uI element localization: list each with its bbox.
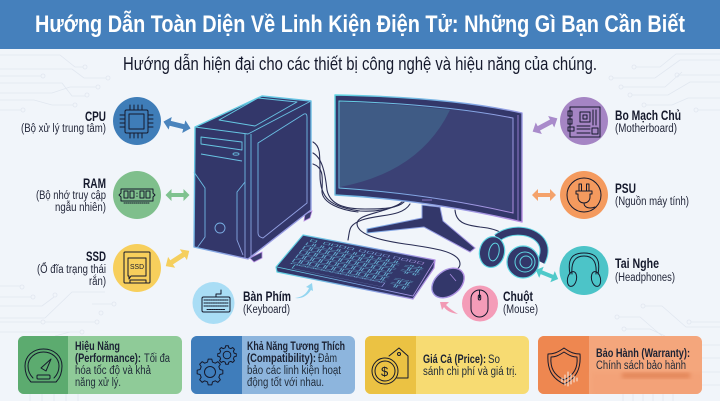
text: performance: hóa tốc độ và khả: [75, 365, 151, 377]
text: compatibility: [247, 341, 345, 389]
label: RAM: (Bộ nhớ truy cập: [36, 190, 106, 202]
text: performance: Tối đa: [144, 353, 170, 365]
icon: keyboard: [202, 290, 230, 312]
monitor screen: [339, 101, 513, 213]
component: keyboard: [192, 282, 291, 324]
label: headphones: [615, 256, 675, 284]
text: performance: Hiệu Năng: [75, 341, 120, 353]
component: headphones: [560, 246, 675, 295]
text: compatibility: động tốt với nhau.: [247, 377, 324, 389]
component: SSD: [37, 244, 161, 292]
arrow: headphones: [534, 264, 560, 285]
label: PSU: (Nguồn máy tính): [615, 196, 689, 208]
component: RAM: [36, 171, 161, 219]
text: price: sánh chi phí và giá trị.: [423, 366, 517, 378]
arrow: mouse: [440, 302, 458, 314]
icon: shield: [548, 348, 580, 384]
arrow: motherboard: [530, 113, 560, 137]
icon: RAM stick: [119, 189, 155, 203]
mouse: [426, 262, 470, 304]
panel: performance: [18, 336, 182, 394]
label: SSD: (Ổ đĩa trạng thái: [37, 263, 106, 276]
monitor: [335, 95, 522, 252]
icon: motherboard: [568, 107, 600, 137]
label: mouse: (Mouse): [503, 304, 538, 316]
component: CPU: [21, 97, 161, 145]
label: RAM: ngẫu nhiên): [55, 201, 106, 214]
icon: CPU chip: [120, 105, 153, 138]
text: performance: năng xử lý.: [75, 377, 121, 389]
arrow: keyboard: [295, 283, 313, 298]
title banner: [0, 0, 720, 49]
headphones: [477, 231, 544, 278]
icon: power plug: [567, 178, 601, 212]
component: PSU: [560, 171, 689, 219]
label: PSU: PSU: [615, 181, 636, 196]
label: mouse: Chuột: [503, 289, 533, 304]
arrow: PSU: [532, 189, 556, 201]
text: compatibility: Khả Năng Tương Thích: [247, 341, 345, 353]
panel: warranty: [538, 336, 704, 397]
label: motherboard: [615, 108, 681, 135]
icon: headphones: [566, 253, 602, 287]
text: price: So: [488, 354, 500, 366]
cables: [313, 142, 503, 272]
label: CPU: (Bộ xử lý trung tâm): [21, 123, 106, 135]
text: price: [423, 354, 517, 378]
label: SSD: [37, 249, 106, 288]
text: compatibility: Đảm: [318, 353, 337, 365]
text: warranty: Bảo Hành (Warranty):: [596, 348, 690, 360]
monitor stand: [367, 205, 475, 252]
text: warranty: [596, 348, 690, 372]
label: mouse: [503, 289, 538, 316]
label: keyboard: Bàn Phím: [243, 289, 291, 304]
icon: SSD drive: SSD: [130, 264, 144, 271]
text: price: Giá Cả (Price):: [423, 354, 486, 366]
text: warranty: Chính sách bảo hành: [596, 360, 686, 372]
label: motherboard: Bo Mạch Chủ: [615, 108, 681, 123]
label: headphones: (Headphones): [615, 272, 675, 284]
text: compatibility: bảo các linh kiện hoạt: [247, 365, 342, 377]
component: mouse: [462, 286, 538, 322]
label: CPU: [21, 109, 106, 135]
label: PSU: [615, 181, 689, 208]
icon: coin and price tag: $: [381, 364, 389, 379]
panel: compatibility: [191, 336, 355, 394]
label: SSD: rắn): [89, 275, 106, 288]
label: headphones: Tai Nghe: [615, 256, 659, 271]
computer tower: [194, 96, 312, 262]
screen highlight: [340, 102, 450, 187]
label: keyboard: [243, 289, 291, 316]
label: keyboard: (Keyboard): [243, 304, 290, 316]
monitor bezel: [335, 95, 522, 222]
label: SSD: SSD: [86, 249, 106, 264]
text: compatibility: (Compatibility):: [247, 353, 316, 365]
label: RAM: [36, 176, 106, 214]
label: motherboard: (Motherboard): [615, 123, 677, 135]
arrow: RAM: [166, 189, 190, 201]
subtitle: Hướng dẫn hiện đại cho các thiết bị công nghệ và hiệu năng của chúng.: [123, 53, 597, 74]
label: RAM: RAM: [83, 176, 106, 191]
icon: speedometer gauge: [25, 349, 62, 382]
icon: mouse: [471, 290, 488, 317]
icon: coin and price tag: [372, 348, 408, 384]
text: performance: [75, 341, 170, 389]
icon: gears: [197, 346, 236, 385]
text: performance: (Performance):: [75, 353, 141, 365]
component: motherboard: [560, 97, 681, 145]
label: CPU: CPU: [85, 109, 106, 124]
arrow: CPU: [162, 115, 192, 135]
arrow: SSD: [162, 245, 193, 272]
keyboard: [276, 235, 435, 299]
panel: price: [365, 336, 529, 394]
